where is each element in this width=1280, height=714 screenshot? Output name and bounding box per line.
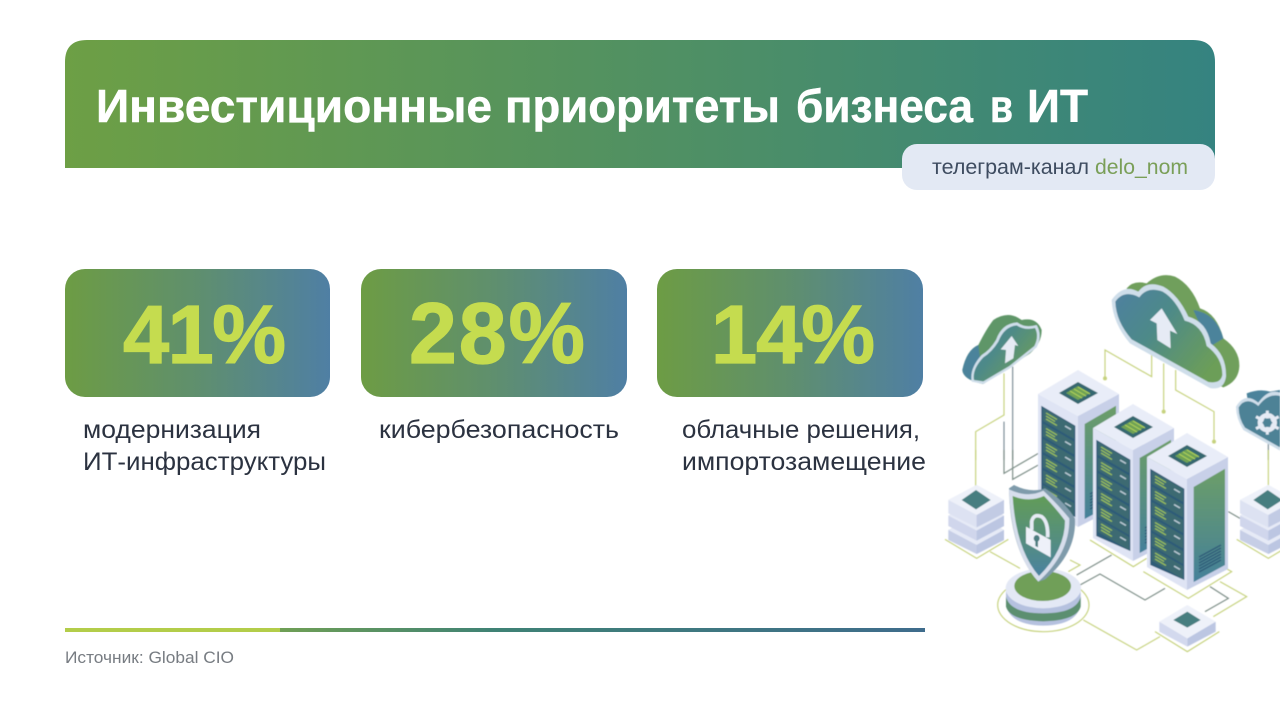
icon: small upload cloud <box>962 315 1042 384</box>
stat card: 14% <box>657 269 923 397</box>
label: cloud solutions, import substitution <box>682 416 926 476</box>
icon: security shield with padlock <box>1009 485 1075 582</box>
stat card: 14%: 14% <box>711 288 875 381</box>
source note: Источник: Global CIO <box>65 648 234 667</box>
connector lines <box>976 350 1268 650</box>
stat card: 28%: 28% <box>409 286 585 382</box>
left storage stack <box>945 485 1008 558</box>
title: бизнеса <box>796 80 973 132</box>
channel badge: телеграм-канал <box>932 156 1089 179</box>
title <box>96 80 1088 132</box>
title: в <box>990 80 1013 132</box>
header banner <box>65 40 1215 168</box>
label: cloud solutions, import substitution: импортозамещение <box>682 448 926 476</box>
label: IT modernisation: модернизация <box>83 416 261 444</box>
right storage stack <box>1237 485 1280 558</box>
label: cloud solutions, import substitution: облачные решения, <box>682 416 920 444</box>
label: IT modernisation <box>83 416 326 476</box>
title: ИТ <box>1027 80 1088 132</box>
title: приоритеты <box>505 80 780 132</box>
title: Инвестиционные <box>96 80 492 132</box>
channel badge: delo_nom <box>1095 156 1188 179</box>
stat card: 28% <box>361 269 627 397</box>
icon: large upload cloud <box>1112 275 1239 388</box>
server racks <box>1038 370 1228 590</box>
icon: gear cloud <box>1236 390 1280 451</box>
label: IT modernisation: ИТ-инфраструктуры <box>83 448 326 476</box>
small device box <box>1155 605 1219 652</box>
stat card: 41%: 41% <box>123 288 286 381</box>
stat card: 41% <box>65 269 330 397</box>
security pedestal <box>1006 568 1081 626</box>
label: cybersecurity: кибербезопасность <box>379 416 619 444</box>
channel badge <box>902 144 1215 190</box>
illustration: IT infrastructure <box>945 275 1280 652</box>
